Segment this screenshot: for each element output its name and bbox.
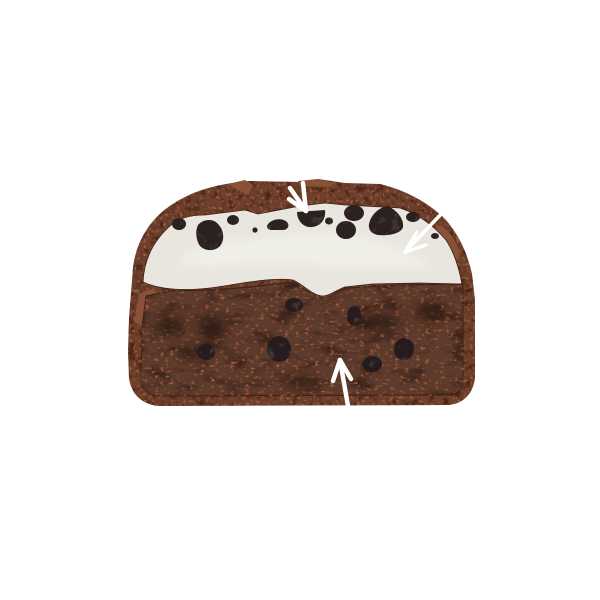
shadowed hollows (156, 304, 446, 387)
chips in cake (197, 298, 414, 372)
milk chocolate top pieces (135, 179, 460, 326)
arrow: top pointing to shell (289, 183, 306, 211)
chocolate chips in cream (172, 205, 439, 250)
cake interior (141, 282, 463, 396)
arrow: bottom pointing to cake (333, 360, 351, 406)
cream filling (143, 203, 462, 296)
chocolate shell (128, 179, 475, 406)
arrow: right pointing to cream (405, 211, 444, 252)
